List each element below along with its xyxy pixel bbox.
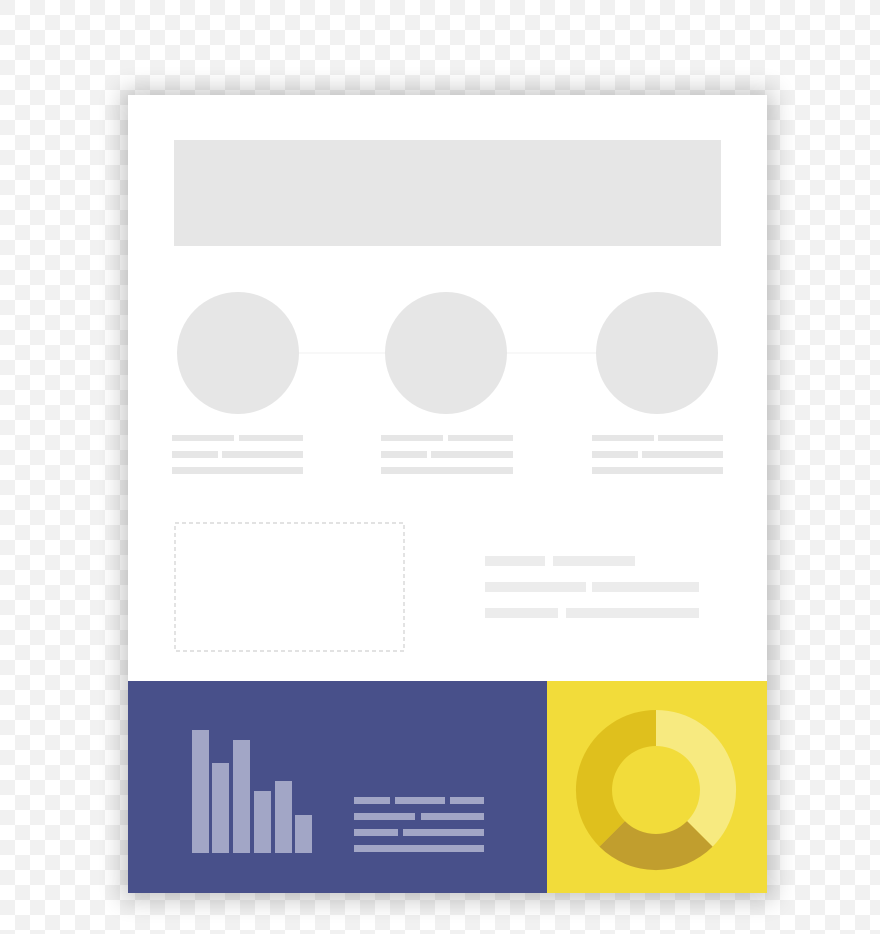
text lines column 1	[172, 435, 303, 474]
circle 3	[596, 292, 718, 414]
donut chart	[576, 710, 736, 870]
text lines column 2	[381, 435, 513, 474]
panel: yellow donut panel	[547, 681, 767, 893]
circle 1	[177, 292, 299, 414]
panel: blue bar chart panel	[128, 681, 547, 893]
card	[128, 95, 767, 893]
legend text lines	[354, 797, 484, 852]
text lines column 3	[592, 435, 723, 474]
dashed image placeholder	[175, 523, 404, 651]
bar chart	[192, 730, 312, 853]
right text lines	[485, 556, 699, 618]
circle 2	[385, 292, 507, 414]
header block	[174, 140, 721, 246]
